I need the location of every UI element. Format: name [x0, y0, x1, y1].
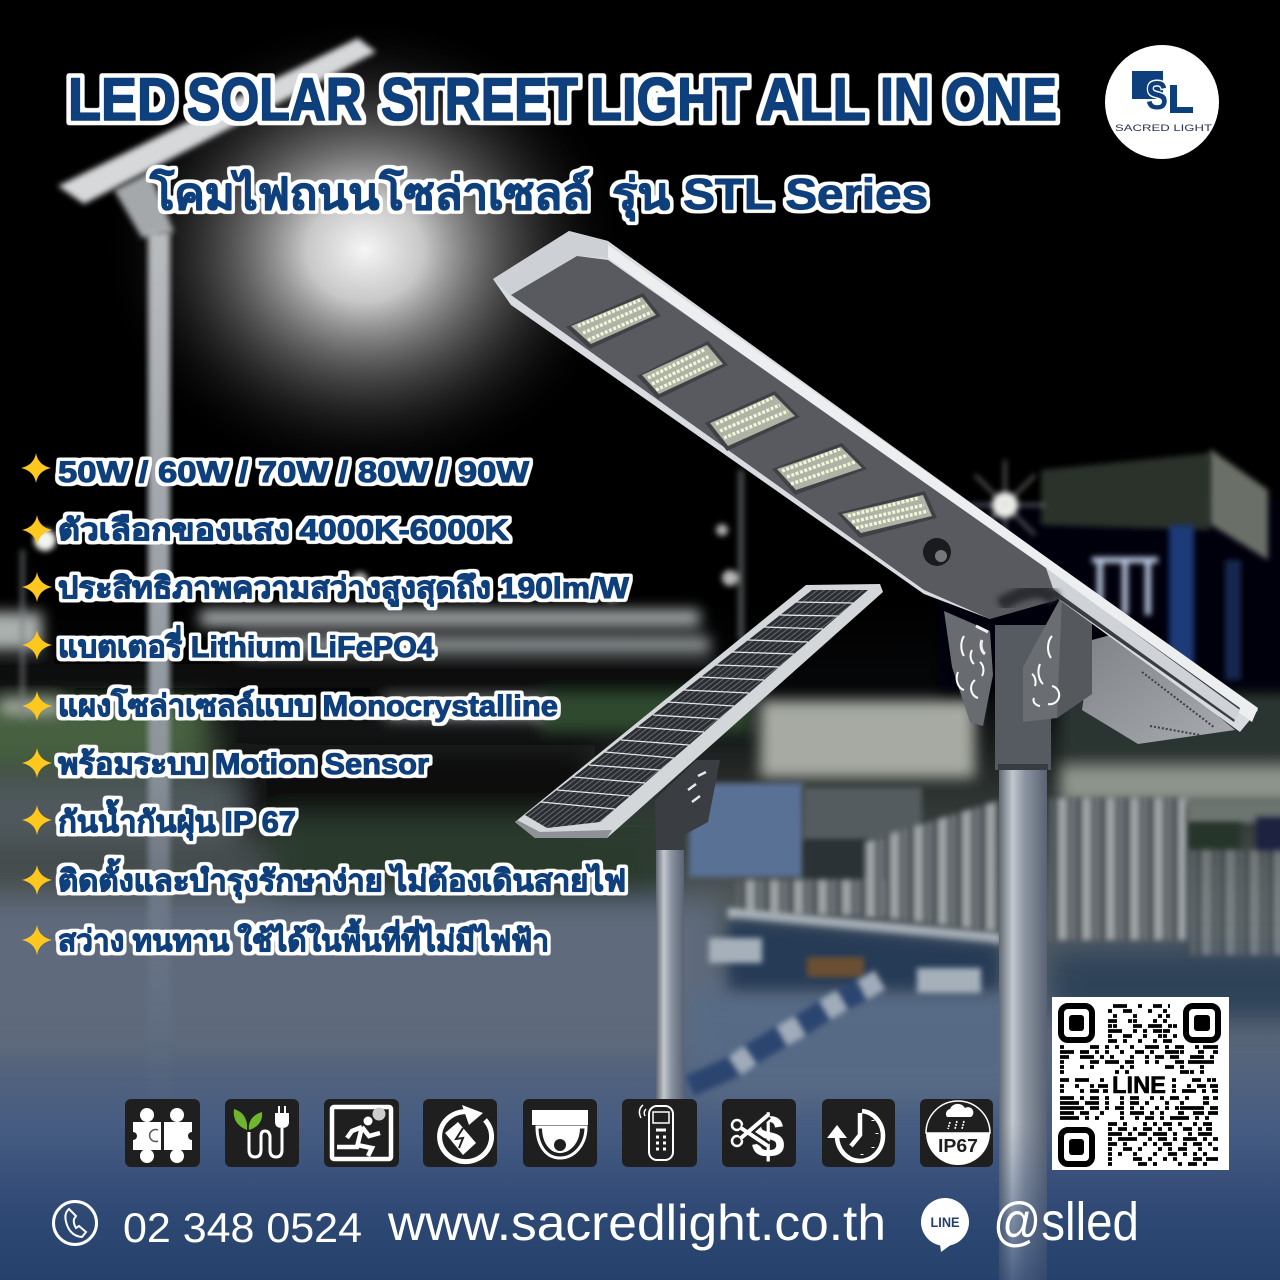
- icon: battery cycle: [423, 1099, 497, 1167]
- contact bar: [54, 1192, 1139, 1252]
- feature: easy install: ติดตั้งและบำรุงรักษาง่าย ไม่ต้องเดินสายไฟ: [58, 858, 626, 900]
- glow and blurred background lamp: [58, 15, 630, 1102]
- feature: colour temperature: ตัวเลือกของแสง 4000K-6000K: [58, 514, 509, 547]
- pole: [999, 768, 1047, 1280]
- main lamp product: [493, 231, 1258, 1280]
- feature: battery: แบตเตอรี่ Lithium LiFePO4: [58, 625, 434, 664]
- pole collar: [995, 625, 1051, 770]
- feature: waterproof: กันน้ำกันฝุ่น IP 67: [58, 799, 296, 841]
- feature: efficacy: ประสิทธิภาพความสว่างสูงสุดถึง 190lm/W: [58, 572, 630, 607]
- icon: motion sensor exit: [324, 1099, 399, 1167]
- title: ALL: [760, 66, 866, 133]
- title: IN: [880, 66, 930, 133]
- logo: [1105, 45, 1219, 159]
- icon: cost saving: [722, 1099, 796, 1170]
- icon: puzzle: [125, 1099, 200, 1167]
- background building: [940, 449, 1280, 690]
- icon: LINE bubble: [921, 1198, 969, 1252]
- logo: S: [1146, 74, 1168, 118]
- icon: dome camera: [523, 1099, 597, 1167]
- title: LIGHT: [590, 66, 747, 133]
- feature: durable: สว่าง ทนทาน ใช้ได้ในพื้นที่ที่ไม่มีไฟฟ้า: [58, 918, 549, 958]
- feature: solar panel: แผงโซล่าเซลล์แบบ Monocrystalline: [58, 687, 558, 723]
- icon: IP67: IP67: [938, 1136, 978, 1156]
- icon: cost saving: $: [751, 1103, 785, 1170]
- icon: IP67: [920, 1099, 993, 1167]
- title: ONE: [945, 66, 1057, 133]
- LINE handle: @slled: [993, 1192, 1139, 1252]
- icon: clock lifetime: [822, 1099, 895, 1167]
- title: SOLAR: [187, 66, 362, 133]
- lamp housing: [493, 231, 1258, 732]
- LINE QR code: [1052, 997, 1229, 1170]
- LINE QR code: LINE: [1112, 1072, 1166, 1099]
- subtitle: รุ่น STL Series: [612, 170, 928, 222]
- title: LED: [68, 66, 176, 133]
- small pole: [655, 760, 720, 1108]
- LED modules: [566, 293, 937, 538]
- subtitle: โคมไฟถนนโซล่าเซลล์: [149, 167, 590, 219]
- feature: waterproof: [22, 799, 296, 841]
- solar panel product with pole: [515, 584, 883, 1108]
- lower solar panel: [1082, 633, 1235, 744]
- icon: LINE bubble: LINE: [930, 1214, 960, 1230]
- subtitle: [149, 167, 928, 222]
- background fence and road: [689, 783, 1280, 1086]
- icon: remote control: [622, 1099, 697, 1167]
- solar cells: [525, 590, 868, 828]
- title: [68, 66, 1057, 133]
- logo: SACRED LIGHT: [1115, 123, 1212, 134]
- background street lights: [20, 460, 1045, 720]
- phone number: 02 348 0524: [123, 1204, 362, 1251]
- panel frame: [515, 584, 883, 838]
- feature: motion sensor: พร้อมระบบ Motion Sensor: [58, 748, 429, 781]
- icon: phone: [54, 1202, 96, 1244]
- website: www.sacredlight.co.th: [387, 1195, 886, 1251]
- feature list: [21, 453, 630, 958]
- title: STREET: [381, 66, 578, 133]
- icon: green energy: [225, 1099, 299, 1167]
- feature: wattage: 50W / 60W / 70W / 80W / 90W: [58, 456, 530, 489]
- bracket fins: [944, 595, 1092, 726]
- icon row: [125, 1099, 993, 1170]
